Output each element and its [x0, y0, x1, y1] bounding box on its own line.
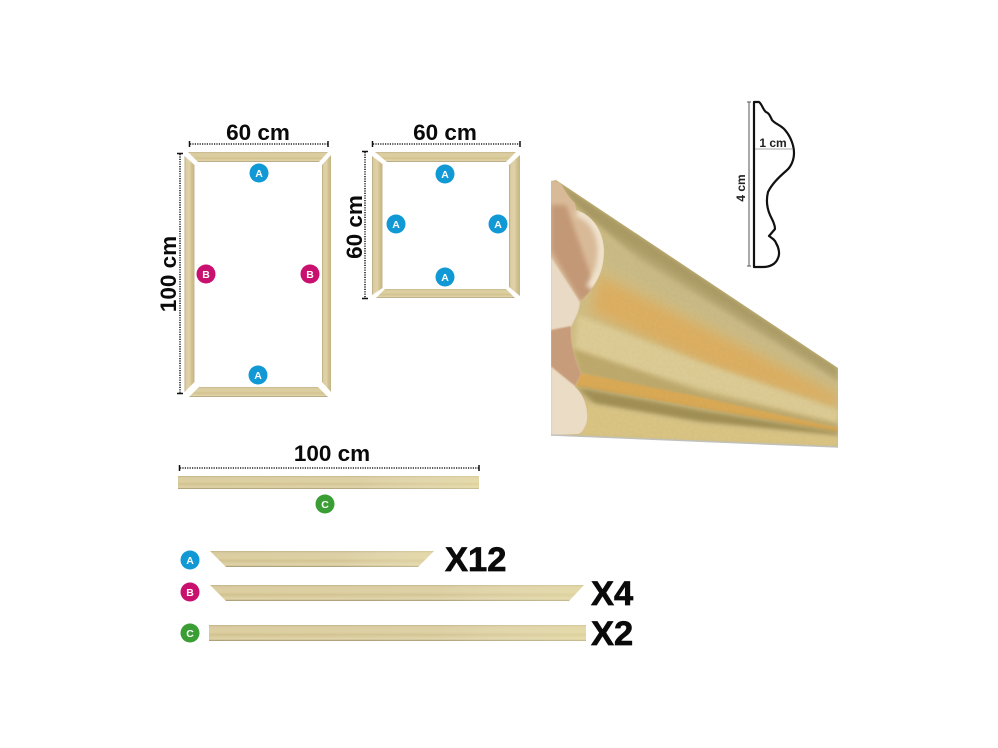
- wood frame pieces: [372, 152, 520, 298]
- row C: X2: [591, 615, 633, 653]
- profile outline: [754, 102, 794, 267]
- row B: B: [186, 587, 194, 599]
- row B: X4: [591, 575, 633, 613]
- frame 100 x 60: [156, 120, 331, 397]
- row A: A: [186, 555, 194, 567]
- badge A top: A: [441, 169, 449, 181]
- badge A left: [386, 214, 406, 234]
- photo shadow edges: [551, 435, 838, 447]
- badge A top: [250, 164, 268, 182]
- dimension: top 60 cm: [372, 120, 520, 147]
- row C: [180, 615, 633, 653]
- wood bar C: [178, 476, 479, 489]
- wood grain texture: [551, 180, 838, 448]
- badge B right: [300, 264, 320, 284]
- badge B right: B: [306, 269, 314, 281]
- badge A bottom: [436, 268, 454, 286]
- badge A top: [436, 164, 454, 184]
- parts legend: [180, 541, 633, 653]
- badge A right: [488, 214, 508, 234]
- row A: [180, 541, 506, 579]
- badge C: [316, 494, 334, 514]
- badge B left: B: [202, 269, 210, 281]
- dimension: top 60 cm: 60 cm: [413, 120, 477, 145]
- row C: C: [186, 628, 194, 640]
- badge A bottom: [248, 366, 268, 384]
- dimension: left 100 cm: 100 cm: [156, 236, 181, 312]
- 4 cm dimension line: [747, 102, 751, 266]
- dimension: top 60 cm: 60 cm: [226, 120, 290, 145]
- frame 60 x 60: [342, 120, 520, 298]
- badge B left: [196, 264, 216, 284]
- dimension: left 60 cm: 60 cm: [342, 195, 367, 259]
- badge A left: A: [392, 219, 400, 231]
- dimension: left 100 cm: [156, 154, 183, 394]
- dimension: 100 cm: 100 cm: [294, 441, 370, 466]
- badge C: C: [321, 499, 329, 511]
- badge A bottom: A: [441, 272, 449, 284]
- badge A top: A: [255, 168, 263, 180]
- moulding photo: [545, 175, 845, 455]
- label 1 cm: 1 cm: [759, 136, 787, 150]
- row A: X12: [445, 541, 506, 579]
- moulding profile diagram: [734, 102, 794, 267]
- dimension: top 60 cm: [190, 120, 328, 147]
- end grain profile: [551, 181, 604, 434]
- long bar 100 cm: [178, 441, 479, 514]
- row B: [180, 575, 633, 613]
- dimension: 100 cm: [180, 441, 479, 471]
- label 4 cm: 4 cm: [734, 174, 748, 202]
- 1 cm dimension line: [755, 148, 792, 150]
- dimension: left 60 cm: [342, 152, 368, 298]
- wood frame pieces: [184, 152, 331, 397]
- badge A bottom: A: [254, 370, 262, 382]
- moulding face: [545, 175, 845, 455]
- badge A right: A: [494, 219, 502, 231]
- infographic canvas: [160, 100, 838, 646]
